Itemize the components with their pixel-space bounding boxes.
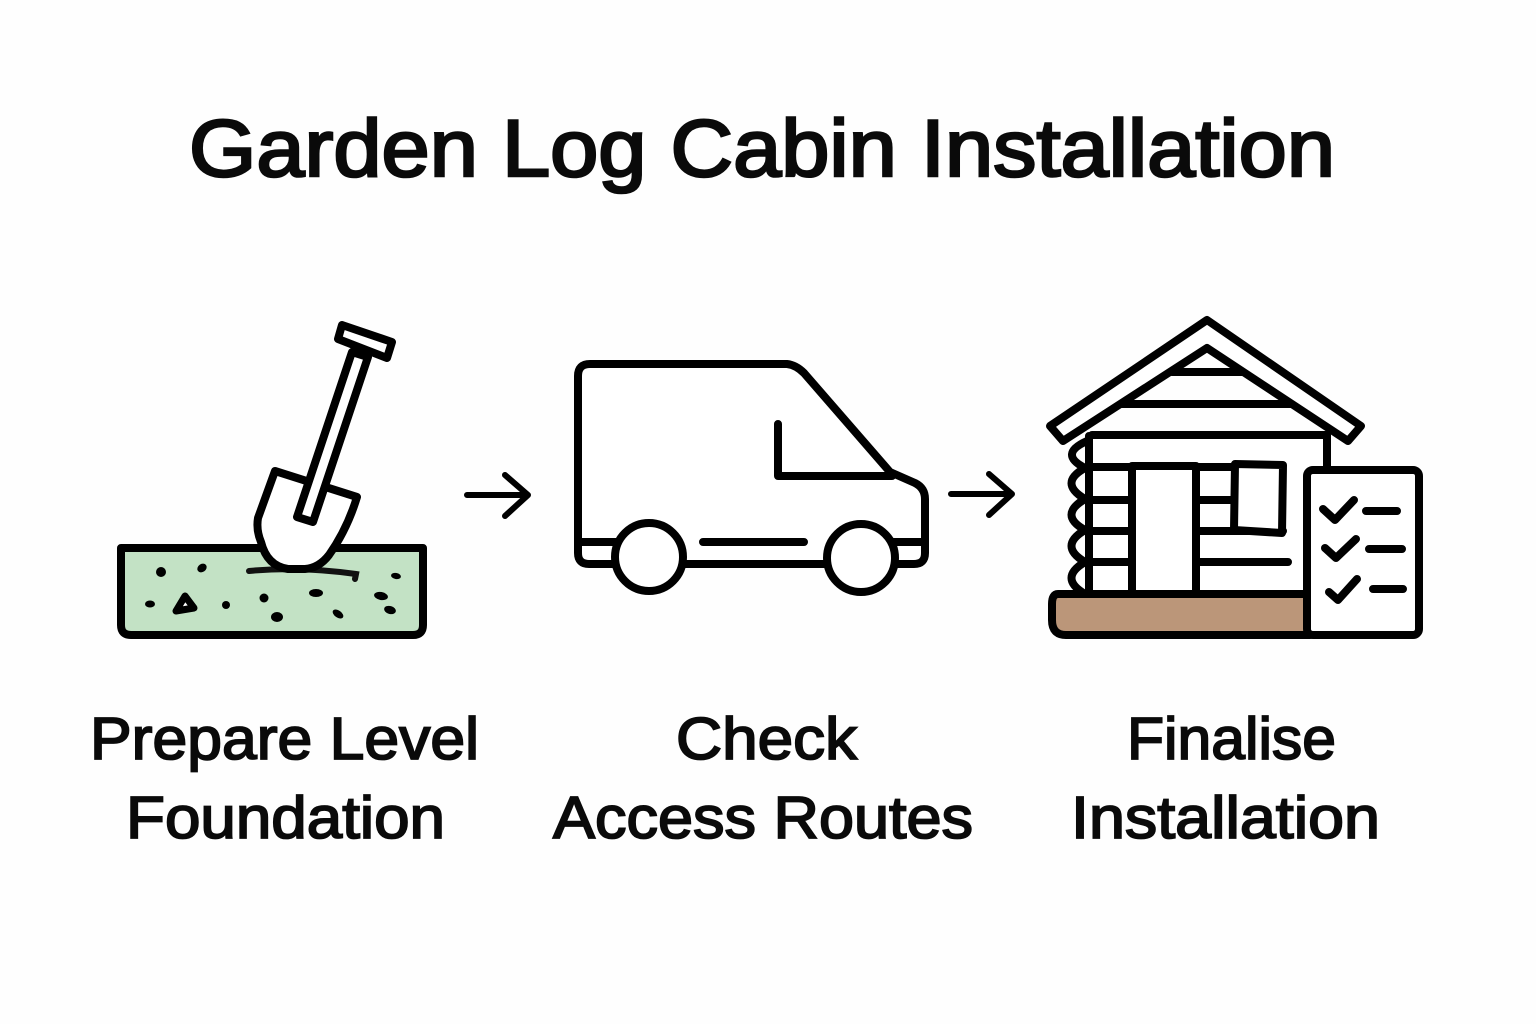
log ends — [1072, 436, 1089, 594]
label: finalise installation: Finalise — [1127, 706, 1336, 772]
cabin base — [1052, 594, 1310, 635]
cabin window — [1234, 464, 1283, 533]
van door and window — [778, 424, 892, 476]
shovel shaft — [297, 352, 368, 522]
label: check access routes: Access Routes — [553, 785, 973, 851]
arrow: step 1 to step 2 — [467, 475, 528, 516]
soil stone — [176, 596, 194, 611]
step 3: finalise installation — [1050, 320, 1419, 851]
step 1: prepare level foundation — [90, 325, 479, 851]
gable lines — [1120, 372, 1294, 404]
van body — [578, 364, 925, 564]
roof — [1050, 320, 1361, 441]
dug line — [249, 569, 356, 579]
icon: log cabin with checklist — [1050, 320, 1419, 635]
label: prepare level foundation: Foundation — [126, 785, 445, 851]
title: Garden Log Cabin Installation — [189, 104, 1335, 194]
label: prepare level foundation: Prepare Level — [90, 706, 479, 772]
shovel blade — [257, 471, 357, 569]
icon: van — [578, 364, 925, 592]
label: check access routes — [553, 706, 973, 851]
checklist items — [1323, 500, 1403, 600]
van wheels — [615, 523, 683, 591]
cabin wall lines — [1090, 435, 1327, 562]
label: finalise installation: Installation — [1071, 785, 1380, 851]
soil block — [121, 548, 423, 635]
checklist board — [1307, 470, 1419, 635]
van side stripes — [580, 538, 923, 546]
icon: shovel in soil — [121, 325, 423, 635]
arrow: step 2 to step 3 — [951, 474, 1012, 515]
step 2: check access routes — [553, 364, 973, 851]
label: finalise installation — [1071, 706, 1380, 851]
label: prepare level foundation — [90, 706, 479, 851]
cabin door — [1132, 466, 1196, 594]
soil specks — [145, 562, 401, 622]
shovel grip — [338, 325, 392, 358]
label: check access routes: Check — [676, 706, 858, 772]
cabin wall — [1089, 435, 1327, 594]
